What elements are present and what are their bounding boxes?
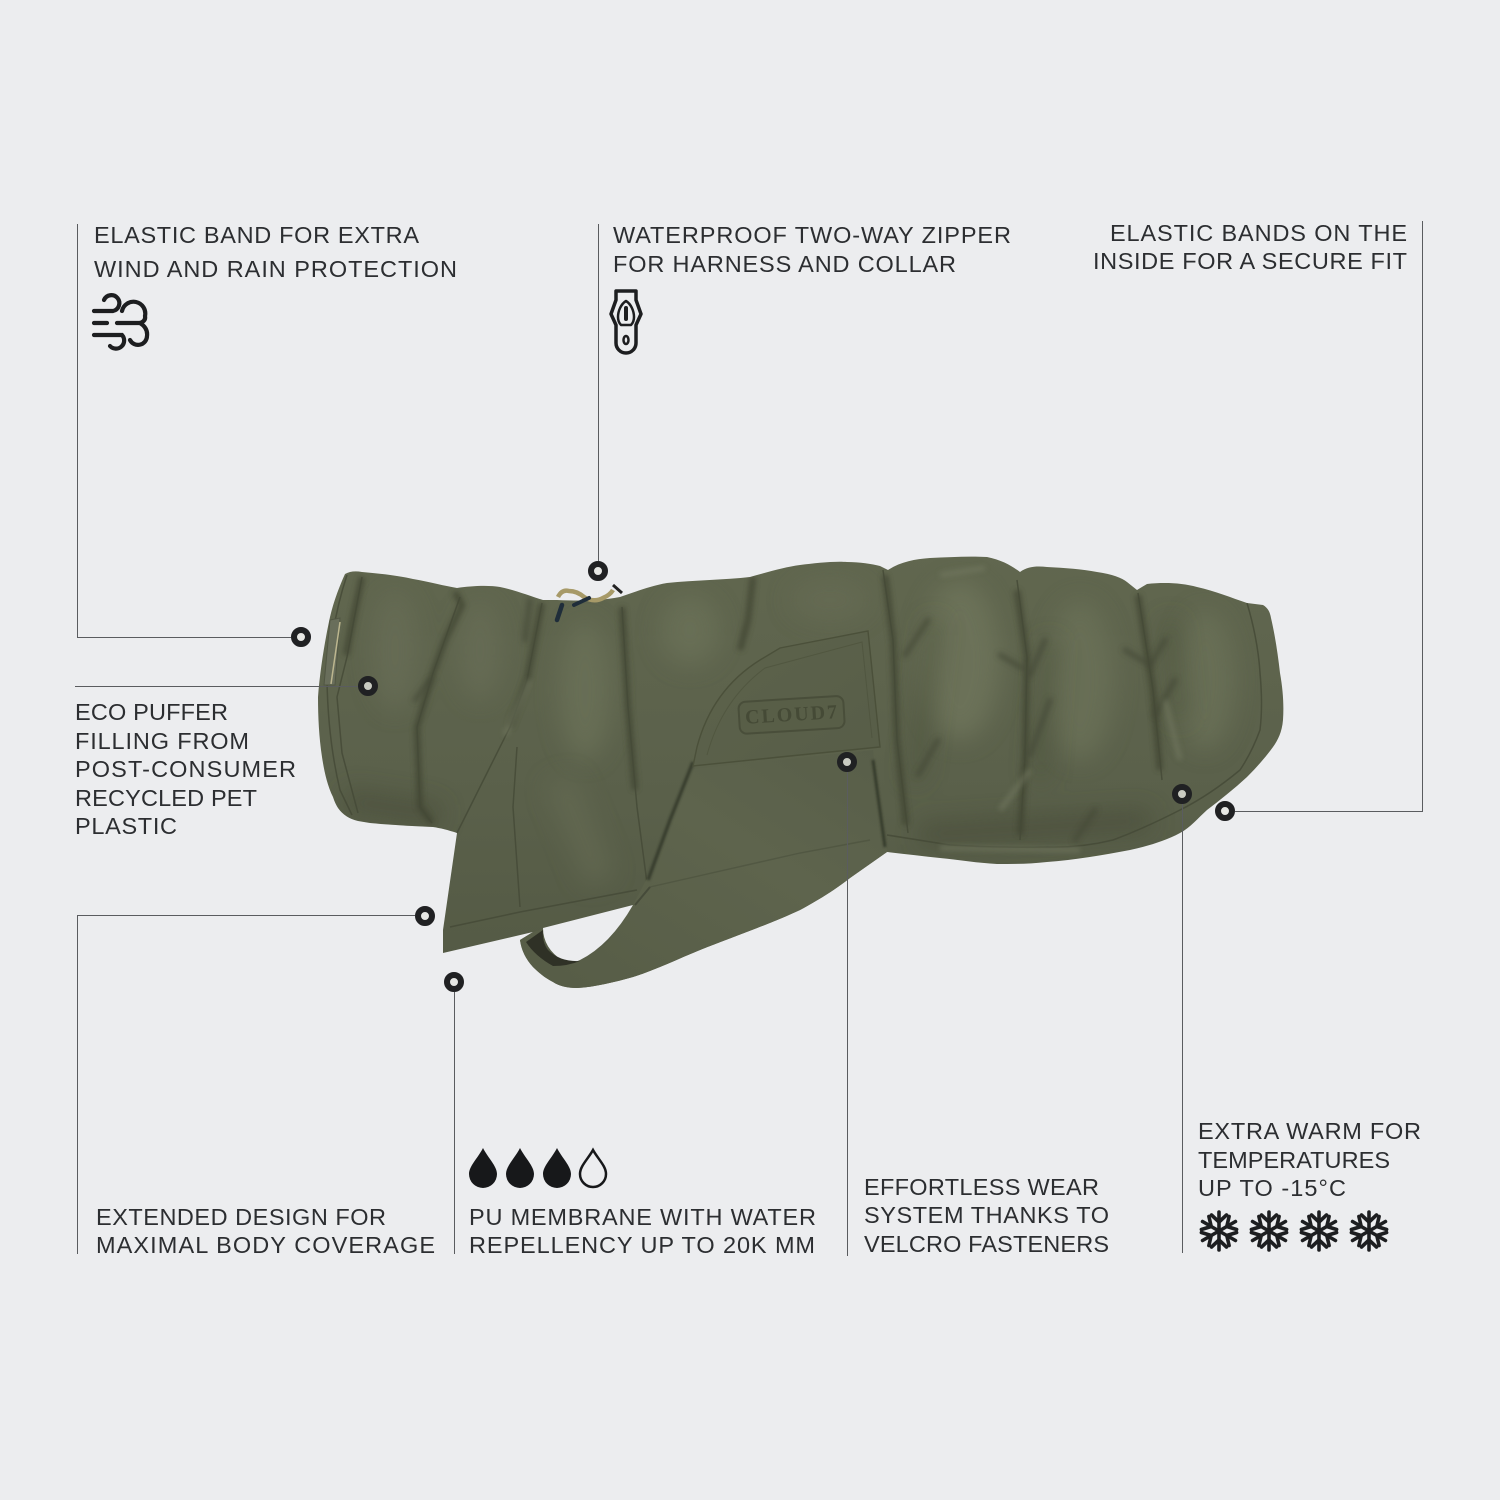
callout: eco puffer: ECO PUFFER — [75, 699, 228, 725]
callout: elastic band: ELASTIC BAND FOR EXTRA — [94, 222, 419, 248]
callout: PU membrane: REPELLENCY UP TO 20K MM — [469, 1232, 815, 1258]
callout: elastic bands inside — [1093, 220, 1407, 274]
strap opening — [526, 905, 633, 966]
icon: zipper — [611, 291, 641, 353]
callout: elastic bands inside: ELASTIC BANDS ON THE — [1110, 220, 1407, 246]
callout: extra warm — [1198, 1118, 1421, 1201]
marker dots — [294, 564, 1232, 989]
leader lines — [75, 221, 1422, 1256]
callout: extra warm: TEMPERATURES — [1198, 1147, 1390, 1173]
belly strap — [520, 750, 887, 988]
callout: effortless wear: EFFORTLESS WEAR — [864, 1174, 1099, 1200]
callout: extra warm: UP TO -15°C — [1198, 1175, 1346, 1201]
callout: extra warm: EXTRA WARM FOR — [1198, 1118, 1421, 1144]
callout: eco puffer: POST-CONSUMER — [75, 756, 296, 782]
puff creases — [415, 600, 1175, 840]
callout: zipper — [613, 222, 1011, 277]
callout: eco puffer — [75, 699, 296, 839]
callout: extended design: EXTENDED DESIGN FOR — [96, 1204, 386, 1230]
callout: elastic bands inside: INSIDE FOR A SECURE FIT — [1093, 248, 1407, 274]
callout: eco puffer: FILLING FROM — [75, 728, 249, 754]
callout: PU membrane — [469, 1204, 816, 1258]
callout: eco puffer: PLASTIC — [75, 813, 177, 839]
logo patch: CLOUD7 — [744, 701, 838, 729]
zipper pull — [557, 585, 622, 620]
callout: PU membrane: PU MEMBRANE WITH WATER — [469, 1204, 816, 1230]
quilting seams — [327, 568, 1262, 927]
icon: water drops rating — [469, 1148, 606, 1188]
callout: extended design — [96, 1204, 435, 1258]
callout: effortless wear: VELCRO FASTENERS — [864, 1231, 1109, 1257]
icon: wind — [94, 295, 147, 349]
collar tag — [324, 618, 340, 685]
logo patch — [738, 696, 845, 734]
illustration: olive puffer dog coat — [310, 550, 1290, 995]
callout: zipper: FOR HARNESS AND COLLAR — [613, 251, 956, 277]
highlights — [505, 568, 1180, 850]
infographic canvas — [75, 221, 1423, 1256]
icon: snowflake rating — [1199, 1212, 1389, 1250]
callout: extended design: MAXIMAL BODY COVERAGE — [96, 1232, 435, 1258]
velcro flap — [693, 631, 885, 847]
callout: effortless wear: SYSTEM THANKS TO — [864, 1202, 1109, 1228]
callout: elastic band — [94, 222, 457, 282]
callout: effortless wear — [864, 1174, 1109, 1257]
callout: zipper: WATERPROOF TWO-WAY ZIPPER — [613, 222, 1011, 248]
callout: eco puffer: RECYCLED PET — [75, 785, 257, 811]
callout: elastic band: WIND AND RAIN PROTECTION — [94, 256, 457, 282]
coat body — [310, 550, 1290, 995]
